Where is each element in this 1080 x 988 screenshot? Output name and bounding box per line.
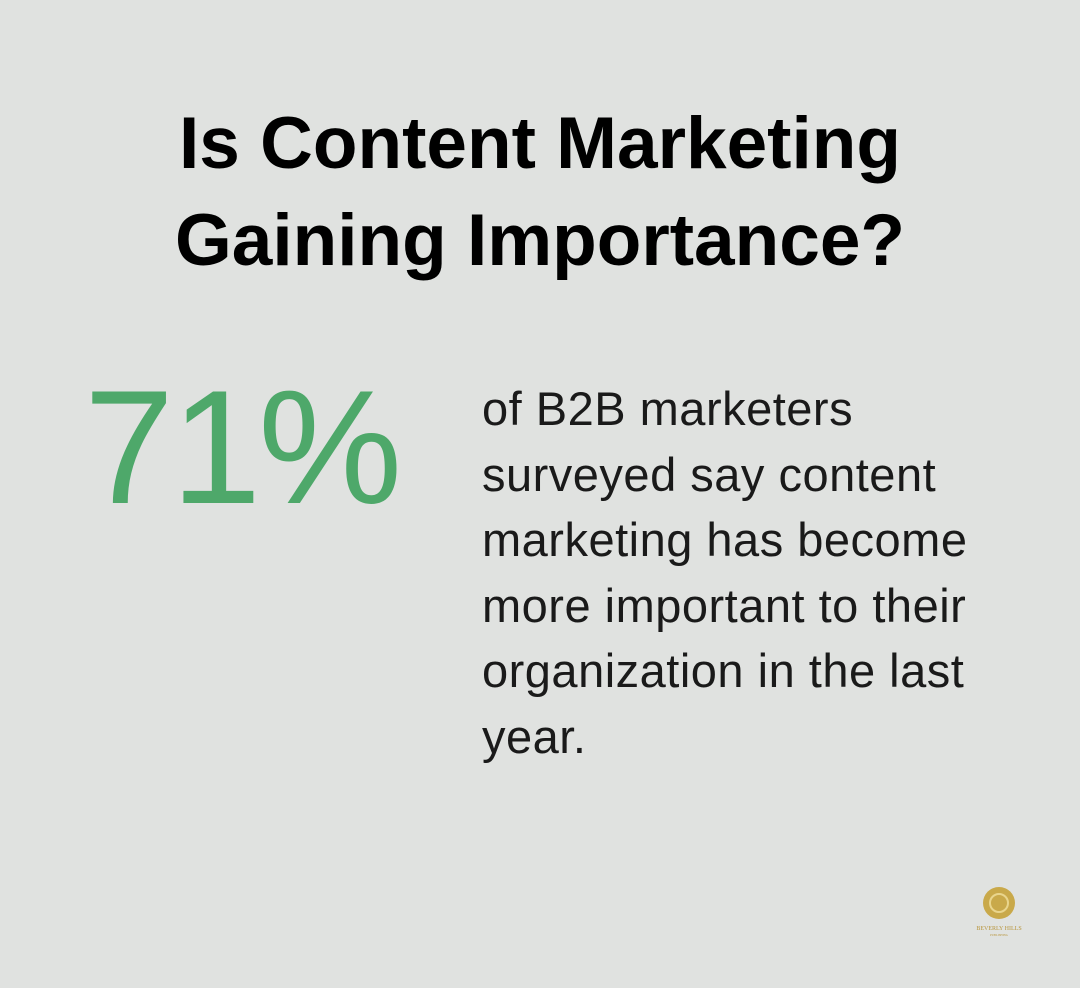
text block: description — [482, 382, 967, 763]
logo: Beverly Hills Publishing: PUBLISHING — [990, 933, 1009, 937]
text block: description: year. — [482, 710, 586, 762]
text block: description: surveyed say content — [482, 448, 936, 500]
text block: description: more important to their — [482, 578, 966, 632]
text block: description: marketing has become — [482, 513, 967, 566]
text block: description: of B2B marketers — [482, 382, 853, 435]
title: Gaining Importance? — [175, 200, 905, 281]
title — [175, 103, 905, 281]
logo: Beverly Hills Publishing — [976, 887, 1022, 937]
title: Is Content Marketing — [179, 103, 901, 184]
text block: description: organization in the last — [482, 644, 964, 697]
logo: Beverly Hills Publishing: BEVERLY HILLS — [976, 926, 1022, 932]
statistic: 71%: 71% — [84, 357, 399, 538]
